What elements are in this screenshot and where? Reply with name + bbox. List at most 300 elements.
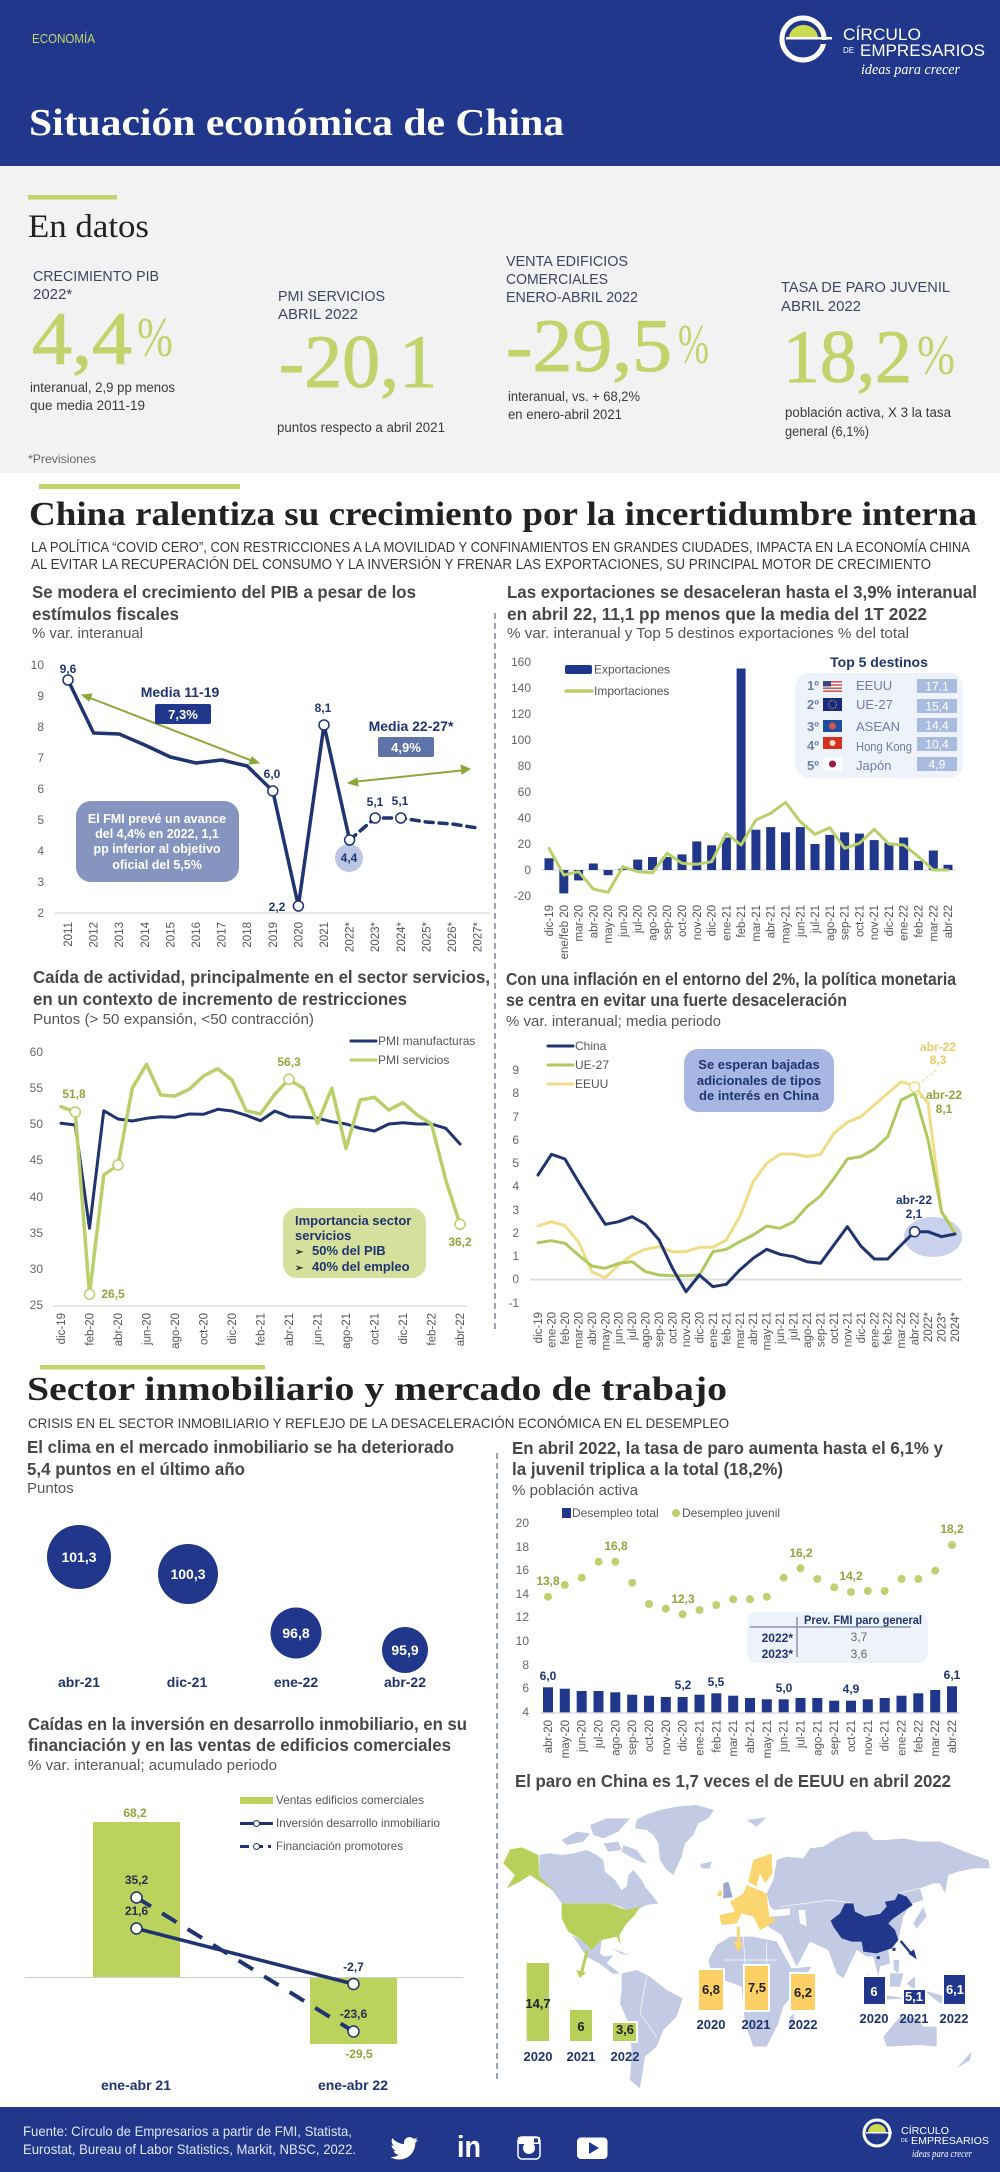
- top 5 destinos table: 2º: [807, 697, 819, 712]
- legend: [548, 1039, 609, 1091]
- x axis: mar-22: [930, 1720, 942, 1756]
- legend: PMI servicios: [378, 1053, 449, 1067]
- x axis: may-21: [762, 1720, 774, 1758]
- x axis: jun-21: [779, 1720, 791, 1753]
- total labels: 5,2: [675, 1678, 692, 1692]
- callout: tipos de interés: de interés en China: [699, 1088, 820, 1103]
- x axis: ago-20: [170, 1313, 182, 1349]
- data labels: [123, 1806, 373, 2061]
- bubble: abr-21: [47, 1525, 111, 1690]
- table: previsión FMI: 2023*: [762, 1647, 793, 1661]
- x axis: abr-21: [748, 1312, 760, 1345]
- chart title: inflación: se centra en evitar una fuerte desaceleración: [506, 990, 847, 1010]
- top 5 destinos table: 14,4: [925, 718, 949, 732]
- logo: EMPRESARIOS: [860, 41, 985, 60]
- Europe: [717, 1853, 777, 1930]
- callout: media 11-19: 7,3%: [168, 707, 198, 722]
- y axis: 9: [512, 1063, 519, 1077]
- stat: venta edificios: COMERCIALES: [506, 271, 608, 288]
- x axis: may-20: [560, 1720, 572, 1758]
- x axis: may-20: [603, 905, 615, 943]
- bars: EEUU: 2020: [524, 2049, 552, 2064]
- x axis: [533, 1311, 962, 1350]
- youth labels: 12,3: [671, 1592, 695, 1606]
- x axis: dic-20: [227, 1313, 239, 1344]
- panel: PIB chart: [31, 582, 490, 952]
- x axis: abr-22: [455, 1313, 467, 1346]
- callout: media 22-27: 4,9%: [391, 740, 421, 755]
- x axis: dic-19: [56, 1313, 68, 1344]
- top 5 destinos table: 17,1: [925, 680, 949, 694]
- x axis: nov-20: [661, 1720, 673, 1755]
- x axis: dic-21: [856, 1312, 868, 1343]
- y axis: [31, 658, 44, 920]
- x axis: sep-21: [816, 1312, 828, 1347]
- x axis: feb-20: [560, 1312, 572, 1345]
- y axis: 160: [511, 655, 531, 669]
- x axis: ago-21: [812, 1720, 824, 1756]
- y axis: 100: [511, 733, 531, 747]
- chart title: PIB: estímulos fiscales: [32, 604, 179, 624]
- UE-27 line: [538, 1093, 955, 1276]
- y axis: 120: [511, 707, 531, 721]
- bubble: abr-22: [382, 1627, 428, 1690]
- China: [831, 1893, 913, 1959]
- bars: UE: 7,5: [748, 1980, 766, 1995]
- callout: FMI: del 4,4% en 2022, 1,1: [95, 827, 219, 841]
- x axis: 2018: [242, 922, 254, 948]
- x axis: oct-20: [677, 905, 689, 937]
- chart title: inversión: financiación y en las ventas de edificios comerciales: [28, 1735, 451, 1755]
- x labels: ene-abr 22: [318, 2077, 388, 2093]
- data labels: abr-22: [896, 1193, 932, 1207]
- icon: linkedin: in: [457, 2129, 481, 2164]
- section tag: ECONOMÍA: [32, 31, 95, 46]
- x axis: nov-21: [842, 1312, 854, 1347]
- table: previsión FMI: [747, 1612, 928, 1663]
- stat: crecimiento PIB: 2022*: [33, 286, 72, 303]
- top 5 destinos table: 3º: [807, 719, 819, 734]
- data labels: 26,5: [101, 1287, 125, 1301]
- data labels: -29,5: [345, 2047, 373, 2061]
- youth labels: 13,8: [536, 1574, 560, 1588]
- financing dashed line: [136, 1898, 354, 2032]
- y axis: 60: [30, 1045, 43, 1059]
- y axis: 9: [37, 689, 44, 703]
- arrow: EEUU: [576, 1950, 587, 1978]
- x axis: sep-21: [840, 905, 852, 940]
- bars: China: 2022: [940, 2011, 968, 2026]
- panel: exportaciones chart: [507, 582, 977, 959]
- youth labels: 16,2: [789, 1546, 813, 1560]
- data labels: -2,7: [343, 1960, 364, 1974]
- highlight ellipse: [904, 1217, 962, 1257]
- x axis: ene-21: [694, 1720, 706, 1756]
- top 5 destinos table: 5º: [807, 758, 819, 773]
- x axis: feb-22: [883, 1312, 895, 1345]
- x axis: mar-21: [728, 1720, 740, 1756]
- x labels: [101, 2077, 388, 2093]
- legend: Inversión desarrollo inmobiliario: [276, 1816, 440, 1830]
- logo small: EMPRESARIOS: [911, 2135, 989, 2147]
- top 5 destinos table: Top 5 destinos: [830, 654, 928, 670]
- x axis: 2015: [165, 922, 177, 948]
- highlight: 4,4: 4,4: [341, 851, 358, 865]
- legend: Importaciones: [594, 684, 669, 698]
- table: previsión FMI: Prev. FMI paro general: [804, 1613, 922, 1627]
- callout: media 22-27: [369, 718, 454, 757]
- x axis: dic-19: [544, 905, 556, 936]
- legend: Financiación promotores: [276, 1839, 403, 1853]
- x axis: oct-20: [198, 1313, 210, 1345]
- logo small: [864, 2120, 989, 2160]
- chart title: PMI: en un contexto de incremento de restricciones: [33, 989, 407, 1009]
- top 5 destinos table: 1º: [807, 678, 819, 693]
- y axis: 80: [518, 759, 531, 773]
- x axis: ago-21: [341, 1313, 353, 1349]
- bars: China: [860, 1974, 968, 2026]
- legend: EEUU: [575, 1077, 608, 1091]
- x axis: ago-20: [641, 1312, 653, 1348]
- callout: sector servicios: servicios: [295, 1228, 351, 1243]
- data points: [70, 1074, 465, 1299]
- y axis: 8: [512, 1086, 519, 1100]
- arrow: UE: [733, 1927, 743, 1953]
- y axis: [516, 1516, 529, 1719]
- x axis: 2023*: [936, 1311, 948, 1342]
- logo small: ideas para crecer: [912, 2149, 972, 2160]
- panel: en datos: [0, 166, 1000, 473]
- stat: PMI servicios: puntos respecto a abril 2021: [277, 420, 445, 435]
- y axis: 18: [516, 1540, 529, 1554]
- x axis: oct-21: [829, 1312, 841, 1344]
- stat: venta edificios: %: [678, 314, 709, 376]
- chart title: inversión: Caídas en la inversión en desarrollo inmobiliario, en su: [28, 1714, 467, 1734]
- chart title: exportaciones: en abril 22, 11,1 pp menos que la media del 1T 2022: [507, 604, 927, 624]
- x axis: feb-21: [711, 1720, 723, 1753]
- y axis: 7: [512, 1110, 519, 1124]
- chart title: PIB: [32, 582, 416, 642]
- x axis: 2025*: [421, 921, 433, 952]
- y axis: 8: [37, 720, 44, 734]
- x axis: 2016: [191, 922, 203, 948]
- y axis: 40: [30, 1190, 43, 1204]
- total labels: 4,9: [843, 1682, 860, 1696]
- legend: PMI manufacturas: [378, 1034, 475, 1048]
- stat: PMI servicios: PMI SERVICIOS: [278, 288, 385, 305]
- logo small: DE: [901, 2138, 909, 2144]
- x axis: 2024*: [950, 1311, 962, 1342]
- x axis: feb-22: [913, 1720, 925, 1753]
- y axis: 40: [518, 811, 531, 825]
- bars: EEUU: 2022: [611, 2049, 639, 2064]
- top 5 destinos table: 4º: [807, 738, 819, 753]
- chart title: inflación: [506, 969, 956, 1030]
- stat: paro juvenil: [781, 279, 955, 439]
- data labels: 36,2: [448, 1235, 472, 1249]
- chart title: paro: % población activa: [512, 1482, 639, 1499]
- USA and Alaska: [503, 1847, 640, 1950]
- x axis: ene-21: [721, 905, 733, 941]
- callout: sector servicios: ➢: [295, 1263, 304, 1274]
- y axis: 16: [516, 1563, 529, 1577]
- y axis: 55: [30, 1081, 43, 1095]
- sales bars: [93, 1822, 397, 2044]
- x axis: ene-22: [869, 1312, 881, 1348]
- total labels: [540, 1668, 961, 1696]
- legend: Desempleo juvenil: [682, 1506, 780, 1520]
- y axis: -1: [508, 1296, 519, 1310]
- stat: crecimiento PIB: 4,4: [32, 298, 132, 381]
- y axis: 45: [30, 1153, 43, 1167]
- y axis: 3: [37, 875, 44, 889]
- x axis: oct-20: [668, 1312, 680, 1344]
- x axis: ene-20: [546, 1312, 558, 1348]
- total labels: 5,0: [776, 1681, 793, 1695]
- x axis: [56, 1313, 467, 1349]
- data labels: 2,1: [906, 1207, 923, 1221]
- flag: EEUU: [823, 681, 842, 692]
- y axis: 12: [516, 1610, 529, 1624]
- legend: Exportaciones: [594, 662, 670, 676]
- x axis: mar-22: [896, 1312, 908, 1348]
- callout: sector servicios: ➢: [295, 1247, 304, 1258]
- EEUU line: [538, 1082, 955, 1278]
- top 5 destinos table: UE-27: [856, 697, 893, 712]
- footnote: *Previsiones: [28, 452, 96, 466]
- x axis: 2012: [89, 922, 101, 948]
- x axis: 2019: [268, 922, 280, 948]
- top 5 destinos table: EEUU: [856, 678, 892, 693]
- stat: venta edificios: VENTA EDIFICIOS: [506, 253, 628, 270]
- callout: sector servicios: 40% del empleo: [312, 1259, 410, 1274]
- chart title: clima: Puntos: [27, 1480, 74, 1497]
- section intro text: [31, 539, 970, 573]
- x axis: dic-20: [678, 1720, 690, 1751]
- stat: paro juvenil: 18,2: [783, 316, 912, 399]
- x axis: [544, 905, 955, 959]
- x axis: 2013: [114, 922, 126, 948]
- y axis: 4: [37, 844, 44, 858]
- data labels: 8,3: [930, 1053, 947, 1067]
- stat: PMI servicios: [277, 288, 445, 435]
- y axis: 6: [37, 782, 44, 796]
- data labels: 21,6: [125, 1904, 149, 1918]
- heading: en datos: En datos: [28, 209, 149, 245]
- x axis: 2017: [217, 922, 229, 948]
- legend: [240, 1793, 440, 1853]
- data labels: 5,1: [392, 794, 409, 808]
- x axis: abr-20: [113, 1313, 125, 1346]
- legend: UE-27: [575, 1058, 609, 1072]
- stat: paro juvenil: ABRIL 2022: [781, 298, 861, 315]
- x axis: jul-20: [594, 1720, 606, 1749]
- bars: UE: 6,8: [702, 1982, 720, 1997]
- x axis: mar-22: [928, 905, 940, 941]
- x axis: ene/feb 20: [559, 905, 571, 959]
- flag: Hong Kong: [823, 737, 842, 749]
- x axis: jul-20: [633, 905, 645, 934]
- chart title: paro: [512, 1438, 943, 1499]
- callout: tipos de interés: adicionales de tipos: [697, 1073, 821, 1088]
- stat: venta edificios: -29,5: [506, 305, 672, 388]
- x axis: feb-22: [914, 905, 926, 938]
- x axis: dic-19: [533, 1312, 545, 1343]
- export bars: [544, 668, 952, 893]
- chart title: PMI: Caída de actividad, principalmente en el sector servicios,: [33, 967, 490, 987]
- top 5 destinos table: 15,4: [925, 700, 949, 714]
- x axis: jul-21: [789, 1312, 801, 1341]
- callout: sector servicios: [283, 1208, 426, 1278]
- y axis: [511, 655, 531, 903]
- x axis: ago-20: [610, 1720, 622, 1756]
- y axis: 2: [37, 906, 44, 920]
- logo: DE: [843, 46, 854, 55]
- x axis: jul-21: [810, 905, 822, 934]
- flag: Japón: [823, 758, 842, 770]
- stat: paro juvenil: %: [917, 325, 955, 387]
- x axis: ene-22: [899, 905, 911, 941]
- bars: China: 6: [870, 1984, 878, 1999]
- x axis: 2026*: [447, 921, 459, 952]
- x axis: dic-20: [707, 905, 719, 936]
- chart title: mapa: El paro en China es 1,7 veces el de EEUU en abril 2022: [515, 1771, 951, 1791]
- y axis: 14: [516, 1587, 529, 1601]
- panel: clima inmobiliario: [27, 1437, 454, 1690]
- panel: paro chart: [512, 1438, 964, 1758]
- x axis: mar-20: [573, 1312, 585, 1348]
- chart title: clima: El clima en el mercado inmobiliario se ha deteriorado: [27, 1437, 454, 1457]
- chart title: clima: [27, 1437, 454, 1497]
- y axis: 10: [31, 658, 44, 672]
- y axis: 4: [512, 1179, 519, 1193]
- x axis: nov-20: [692, 905, 704, 940]
- leader lines: [916, 1069, 938, 1103]
- chart title: inflación: Con una inflación en el entorno del 2%, la política monetaria: [506, 969, 956, 989]
- y axis: 6: [522, 1681, 529, 1695]
- panel: PMI chart: [30, 967, 490, 1349]
- stat: crecimiento PIB: interanual, 2,9 pp menos: [30, 380, 175, 395]
- bubble: abr-22: 95,9: [391, 1642, 419, 1658]
- flag: UE: [823, 698, 842, 711]
- x axis: feb-20: [84, 1313, 96, 1346]
- highlight: 4,4: [335, 844, 363, 872]
- top 5 destinos table: 10,4: [925, 738, 949, 752]
- x axis: sep-21: [829, 1720, 841, 1755]
- y axis: 35: [30, 1226, 43, 1240]
- stat: paro juvenil: población activa, X 3 la tasa: [785, 405, 951, 420]
- stat: crecimiento PIB: que media 2011-19: [30, 398, 145, 413]
- data labels: abr-22: [920, 1040, 956, 1054]
- youth labels: 14,2: [839, 1569, 863, 1583]
- x axis: nov-21: [863, 1720, 875, 1755]
- import line: [549, 802, 948, 892]
- x axis: abr-20: [587, 1312, 599, 1345]
- x axis: jun-20: [618, 905, 630, 938]
- x axis: 2011: [63, 922, 75, 947]
- y axis: 20: [518, 837, 531, 851]
- total labels: 6,0: [540, 1669, 557, 1683]
- x axis: abr-22: [943, 905, 955, 938]
- x axis: feb-21: [736, 905, 748, 938]
- UK: [723, 1882, 733, 1898]
- x axis: mar-21: [751, 905, 763, 941]
- logo small: CÍRCULO: [901, 2124, 949, 2137]
- x axis: abr-22: [910, 1312, 922, 1345]
- x axis: may-20: [600, 1312, 612, 1350]
- chart title: inflación: % var. interanual; media periodo: [506, 1013, 721, 1030]
- x axis: sep-20: [662, 905, 674, 940]
- bars: UE: 6,2: [794, 1985, 812, 2000]
- x axis: nov-21: [869, 905, 881, 940]
- youth labels: [536, 1522, 964, 1606]
- x axis: dic-21: [880, 1720, 892, 1751]
- y axis: 1: [512, 1249, 519, 1263]
- x axis: oct-21: [854, 905, 866, 937]
- PMI manufacturas line: [61, 1109, 460, 1228]
- data labels: 5,1: [367, 795, 384, 809]
- PMI servicios line: [61, 1064, 460, 1294]
- x axis: dic-20: [694, 1312, 706, 1343]
- callout: tipos de interés: [684, 1049, 834, 1112]
- y axis: 30: [30, 1262, 43, 1276]
- callout: FMI: El FMI prevé un avance: [88, 812, 226, 826]
- section heading: crecimiento: China ralentiza su crecimiento por la incertidumbre interna: [29, 496, 977, 533]
- x axis: abr-20: [543, 1720, 555, 1753]
- y axis: 0: [524, 863, 531, 877]
- footer band: [0, 2107, 1000, 2172]
- x axis: dic-21: [884, 905, 896, 936]
- main title: Situación económica de China: [29, 102, 564, 144]
- callout: media 11-19: Media 11-19: [141, 684, 220, 700]
- x axis: 2024*: [396, 921, 408, 952]
- x axis: abr-20: [588, 905, 600, 938]
- y axis: 0: [512, 1272, 519, 1286]
- x axis: abr-22: [947, 1720, 959, 1753]
- map shapes: [503, 1805, 990, 2088]
- bubble: abr-22: abr-22: [384, 1674, 426, 1690]
- x axis: dic-21: [398, 1313, 410, 1344]
- data labels: 8,1: [936, 1102, 953, 1116]
- x axis: mar-20: [574, 905, 586, 941]
- x axis: nov-20: [681, 1312, 693, 1347]
- bubble: dic-21: 100,3: [170, 1566, 206, 1582]
- callout: FMI: pp inferior al objetivo: [93, 842, 221, 856]
- y axis: 5: [512, 1156, 519, 1170]
- stat: crecimiento PIB: %: [137, 307, 173, 369]
- x axis: ago-21: [825, 905, 837, 941]
- bars: UE: 2021: [742, 2017, 770, 2032]
- x axis: jul-20: [627, 1312, 639, 1341]
- x axis: feb-21: [721, 1312, 733, 1345]
- chart title: paro: En abril 2022, la tasa de paro aumenta hasta el 6,1% y: [512, 1438, 943, 1458]
- x axis: mar-21: [735, 1312, 747, 1348]
- bars: EEUU: 2021: [567, 2049, 595, 2064]
- top 5 destinos table: 4,9: [929, 758, 946, 772]
- investment solid line: [136, 1928, 354, 1984]
- total labels: 5,5: [708, 1675, 725, 1689]
- data points: [63, 675, 406, 911]
- stat: paro juvenil: TASA DE PARO JUVENIL: [781, 279, 950, 296]
- bubble: ene-22: ene-22: [274, 1674, 318, 1690]
- chart title: exportaciones: Las exportaciones se desaceleran hasta el 3,9% interanual: [507, 582, 977, 602]
- header band: [0, 0, 1000, 166]
- chart title: paro: la juvenil triplica a la total (18,2%): [512, 1459, 783, 1479]
- table: previsión FMI: 3,7: [851, 1630, 868, 1644]
- GDP forecast line: [350, 818, 478, 840]
- bubble: dic-21: dic-21: [167, 1674, 207, 1690]
- x axis: jul-21: [796, 1720, 808, 1749]
